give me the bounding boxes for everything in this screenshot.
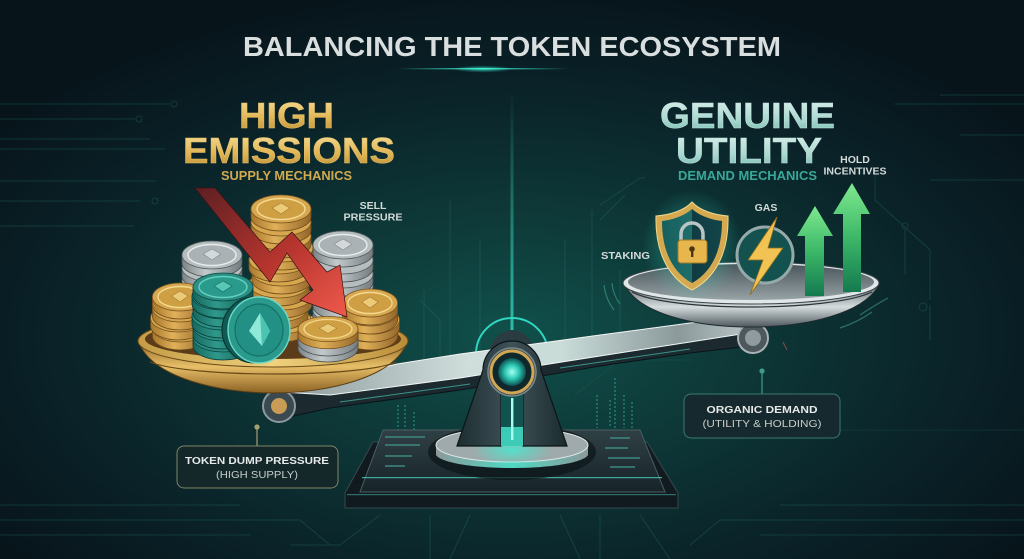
heading: high emissions	[183, 95, 395, 183]
heading: high emissions: EMISSIONS	[183, 130, 395, 171]
callout: organic demand	[684, 368, 840, 438]
coin stack: centre gold	[248, 195, 313, 342]
icon: shield with padlock	[642, 190, 742, 302]
coin stack: left silver	[182, 241, 242, 302]
label: hold incentives	[824, 154, 886, 178]
motion swooshes around right pan	[604, 283, 888, 350]
left pivot	[263, 390, 295, 422]
central gear	[488, 348, 536, 396]
label: hold incentives: INCENTIVES	[824, 166, 886, 178]
label: staking: STAKING	[601, 250, 650, 262]
icon: green up arrow tall	[833, 183, 870, 292]
label: gas: GAS	[755, 202, 777, 214]
callout: organic demand: ORGANIC DEMAND	[706, 404, 818, 416]
coin stacks	[151, 195, 399, 363]
fulcrum back arch and halo	[476, 318, 548, 360]
data dot columns	[398, 378, 632, 430]
title underline glow	[398, 66, 568, 72]
coin stack: teal	[192, 273, 253, 360]
left pan: gold bowl	[138, 315, 408, 393]
label: hold incentives: HOLD	[840, 154, 870, 166]
callout: organic demand: (UTILITY & HOLDING)	[702, 418, 822, 430]
right pivot	[738, 323, 768, 353]
title: BALANCING THE TOKEN ECOSYSTEM	[243, 31, 781, 62]
coin: large teal ethereum	[222, 297, 290, 363]
label: sell pressure: PRESSURE	[344, 212, 402, 224]
coin stack: right gold	[342, 289, 399, 350]
base plate	[345, 430, 678, 508]
heading: genuine utility: DEMAND MECHANICS	[678, 168, 817, 183]
heading: high emissions: SUPPLY MECHANICS	[221, 168, 352, 183]
front coin stack	[298, 316, 358, 362]
vertical light beam	[510, 90, 514, 375]
heading: genuine utility: GENUINE	[660, 95, 835, 136]
coin stack: right silver	[313, 231, 373, 332]
label: sell pressure	[344, 200, 402, 224]
callout: token dump pressure: (HIGH SUPPLY)	[216, 469, 298, 481]
support post	[457, 341, 567, 446]
icon: lightning bolt gas coin	[737, 217, 793, 295]
heading: genuine utility	[660, 95, 835, 183]
icon: red falling arrow	[195, 188, 347, 317]
heading: high emissions: HIGH	[239, 95, 334, 136]
balance beam	[270, 316, 750, 418]
fulcrum	[345, 341, 678, 508]
coin stack: left gold	[151, 283, 208, 350]
right pan: silver dish	[623, 262, 879, 327]
callout: token dump pressure: TOKEN DUMP PRESSURE	[185, 455, 329, 467]
heading: genuine utility: UTILITY	[676, 130, 822, 171]
callout: token dump pressure	[177, 424, 338, 488]
label: sell pressure: SELL	[360, 200, 387, 212]
icon: green up arrow short	[797, 206, 833, 296]
pedestal disc	[428, 424, 596, 480]
